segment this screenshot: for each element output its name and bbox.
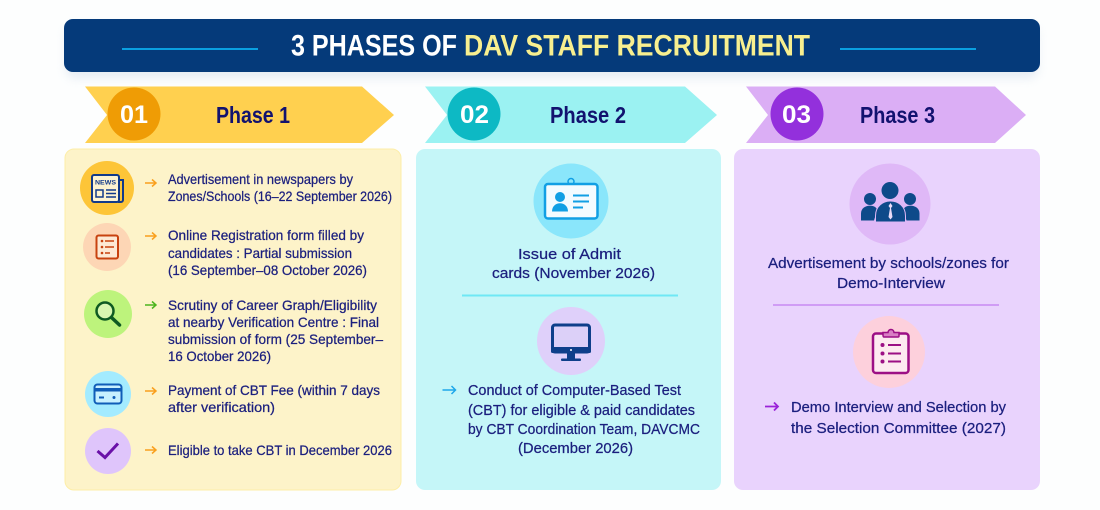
phase 1 header arrow: 01 <box>120 101 148 129</box>
demo interview text: Demo Interview and Selection by <box>791 399 1006 416</box>
phase 2 header arrow <box>425 86 717 143</box>
step 2 text <box>168 227 367 278</box>
phase 3 header arrow: Phase 3 <box>860 102 935 128</box>
step 3 text: 16 October 2026) <box>168 348 271 364</box>
step 4 text <box>168 382 380 415</box>
panel: phase 3 steps <box>734 149 1040 490</box>
demo interview text: the Selection Committee (2027) <box>791 420 1006 437</box>
icon: computer monitor <box>537 307 605 375</box>
arrow 2 <box>145 232 156 240</box>
admit card text: cards (November 2026) <box>492 265 655 282</box>
admit card text <box>492 246 655 282</box>
arrow 1 <box>145 180 156 186</box>
CBT text <box>468 382 700 457</box>
step 3 text: submission of form (25 September– <box>168 331 383 347</box>
icon: clipboard <box>853 316 925 388</box>
phase 1 header arrow <box>85 86 394 143</box>
icon: newspaper: NEWS <box>95 180 117 186</box>
step 4 text: Payment of CBT Fee (within 7 days <box>168 382 380 398</box>
step 3 text: at nearby Verification Centre : Final <box>168 314 379 330</box>
step 4 text: after verification) <box>168 399 275 415</box>
arrow 3 <box>145 302 156 308</box>
step 2 text: (16 September–08 October 2026) <box>168 262 367 278</box>
phase 3 header arrow: 03 <box>782 101 811 129</box>
step 3 text: Scrutiny of Career Graph/Eligibility <box>168 297 377 313</box>
CBT text: (CBT) for eligible & paid candidates <box>468 402 695 419</box>
arrow <box>765 402 778 410</box>
CBT text: (December 2026) <box>518 440 633 457</box>
phase 2 header arrow: 02 <box>460 101 489 129</box>
title: 3 PHASES OF <box>291 30 457 62</box>
CBT text: Conduct of Computer-Based Test <box>468 382 682 399</box>
step 1 text: Advertisement in newspapers by <box>168 171 353 187</box>
title: DAV STAFF RECRUITMENT <box>464 30 810 62</box>
icon: check mark <box>85 428 131 474</box>
icon: newspaper <box>80 161 134 215</box>
phase 2 header arrow: Phase 2 <box>550 102 626 128</box>
admit card text: Issue of Admit <box>518 246 622 263</box>
step 2 text: candidates : Partial submission <box>168 245 352 261</box>
arrow 5 <box>145 446 156 454</box>
icon: magnifier <box>84 290 132 338</box>
icon: form <box>83 223 131 271</box>
icon: team of people <box>850 164 930 244</box>
phase 3 header arrow <box>746 86 1026 143</box>
step 1 text <box>168 171 392 204</box>
icon: admit card <box>534 164 608 238</box>
arrow <box>442 386 456 394</box>
panel: phase 1 steps <box>65 149 401 490</box>
panel: phase 2 steps <box>416 149 721 490</box>
advertisement text: Demo-Interview <box>837 275 945 292</box>
step 2 text: Online Registration form filled by <box>168 227 364 243</box>
icon: payment card <box>85 371 131 417</box>
step 1 text: Zones/Schools (16–22 September 2026) <box>168 188 392 204</box>
CBT text: by CBT Coordination Team, DAVCMC <box>468 421 700 438</box>
step 3 text <box>168 297 383 364</box>
title banner <box>64 19 1040 72</box>
demo interview text <box>791 399 1006 437</box>
advertisement text: Advertisement by schools/zones for <box>768 255 1009 272</box>
arrow 4 <box>145 388 156 394</box>
step 5 text: Eligible to take CBT in December 2026 <box>168 442 392 458</box>
advertisement text <box>768 255 1009 292</box>
phase 1 header arrow: Phase 1 <box>216 102 290 128</box>
